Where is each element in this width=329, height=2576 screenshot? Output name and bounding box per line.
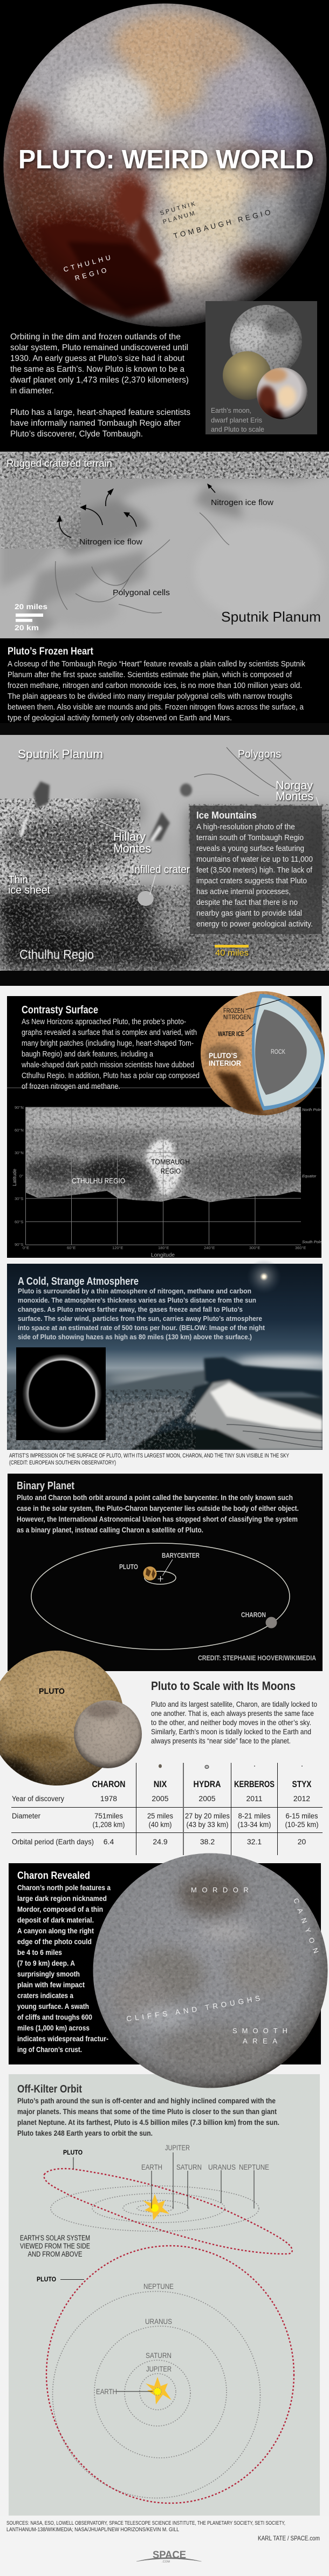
labels: WATER ICE <box>218 1031 244 1038</box>
body text: Mordor, composed of a thin <box>17 1905 103 1913</box>
body text: surprisingly smooth <box>17 1970 80 1978</box>
body text: Pluto’s path around the sun is off-center and and highly inclined compared with the <box>17 2097 276 2105</box>
axis labels: 90°N <box>15 1105 24 1110</box>
intro text <box>10 332 190 439</box>
axis labels: 30°N <box>15 1150 24 1155</box>
map labels <box>72 1157 190 1185</box>
row: diameter: 25 miles <box>147 1811 173 1820</box>
row: year of discovery: 1978 <box>100 1794 117 1803</box>
body text: nearby gas giant to provide tidal <box>196 909 302 918</box>
icons: small moons <box>159 1764 303 1769</box>
icon: Pluto <box>143 1566 156 1580</box>
label: Cthulhu Regio: Cthulhu Regio <box>19 948 94 962</box>
caption: viewing angles: EARTH’S SOLAR SYSTEM <box>20 2234 90 2242</box>
intro text: have informally named Tombaugh Regio after <box>10 419 181 428</box>
intro text: Pluto’s discoverer, Clyde Tombaugh. <box>10 430 143 439</box>
leader lines <box>99 797 322 895</box>
planet orbits <box>53 2291 260 2498</box>
caption: artist's impression: (CREDIT: EUROPEAN SOUTHERN OBSERVATORY) <box>9 1460 116 1466</box>
panel: Off-Kilter Orbit <box>17 2083 294 2503</box>
heading: Binary Planet <box>17 1480 74 1492</box>
image: ice mountains photo <box>0 735 329 972</box>
labels: JUPITER <box>165 2143 190 2152</box>
row: year of discovery: 2012 <box>293 1794 310 1803</box>
axis labels: South Pole <box>302 1239 322 1244</box>
axis labels: 60°N <box>15 1128 24 1133</box>
body text: miles (1,000 km) across <box>17 2024 90 2032</box>
body text: terrain south of Tombaugh Regio <box>196 834 304 842</box>
diagram: side view of orbits <box>44 2143 292 2254</box>
labels: PLUTO’S <box>209 1051 237 1060</box>
table headers: KERBEROS <box>234 1780 275 1789</box>
icon: barycenter cross <box>157 1576 163 1582</box>
photo labels: Hillary <box>113 830 146 843</box>
body text: Cthulhu Regio. In addition, Pluto has a polar cap composed <box>22 1072 200 1080</box>
row: orbital period: 32.1 <box>247 1837 262 1846</box>
axis labels: 300°E <box>249 1245 261 1250</box>
map: Pluto surface <box>12 1105 322 1258</box>
planet orbits <box>51 2186 259 2231</box>
photo labels: Polygons <box>238 748 281 760</box>
caption: to scale: dwarf planet Eris <box>211 416 262 424</box>
image: artist's surface view <box>7 1357 329 1450</box>
Pluto orbit <box>46 2246 294 2503</box>
body text: side of Pluto showing hazes as high as 80 miles (130 km) above the surface.) <box>18 1333 252 1341</box>
row: diameter <box>12 1811 318 1829</box>
body text: graphs revealed a surface that is complex and varied, with <box>22 1028 197 1037</box>
labels: NEPTUNE <box>143 2282 174 2291</box>
row: diameter: (43 by 33 km) <box>187 1820 229 1829</box>
panel: hero <box>0 0 329 452</box>
labels: FROZEN <box>223 1008 244 1014</box>
row: orbital period: 20 <box>298 1837 306 1846</box>
body text: into space at an estimated rate of 500 tons per hour. (BELOW: Image of the night <box>18 1324 265 1332</box>
heading: A Cold, Strange Atmosphere <box>18 1276 139 1287</box>
row: year of discovery: Year of discovery <box>12 1794 64 1803</box>
panel: Charon Revealed <box>9 1853 328 2088</box>
body text: monoxide. The atmosphere’s thickness varies as Pluto’s distance from the sun <box>18 1296 256 1304</box>
intro text: 1930. An early guess at Pluto’s size had it about <box>10 354 185 363</box>
caption: artist's impression <box>9 1453 289 1466</box>
axis labels: Longitude <box>151 1252 175 1258</box>
row: diameter: (1,208 km) <box>93 1820 125 1829</box>
body text: type of geological activity formerly only observed on Earth and Mars. <box>8 714 232 723</box>
photo labels: Montes <box>113 842 151 855</box>
body text: As New Horizons approached Pluto, the probe’s photo- <box>22 1018 186 1026</box>
caption: viewing angles: VIEWED FROM THE SIDE <box>20 2242 90 2250</box>
body text: plain with few impact <box>17 1981 85 1989</box>
logo: Space.com <box>136 2550 202 2564</box>
labels: EARTH <box>141 2163 162 2171</box>
body text: A closeup of the Tombaugh Regio “Heart” feature reveals a plain called by scientists Sputnik <box>8 660 306 669</box>
body text: A canyon along the right <box>17 1927 94 1935</box>
table headers: NIX <box>154 1780 167 1789</box>
diagram: top view of orbits <box>37 2246 294 2503</box>
body text: of cliffs and troughs 600 <box>17 2013 92 2021</box>
row: diameter: 8-21 miles <box>238 1811 271 1820</box>
axis labels: 30°S <box>15 1196 23 1201</box>
body text <box>21 1018 200 1091</box>
body text: many bright patches (including huge, heart-shaped Tom- <box>22 1039 194 1048</box>
body text: impact craters suggests that Pluto <box>196 877 307 885</box>
row: diameter: 6-15 miles <box>286 1811 318 1820</box>
cutaway: water ice layer <box>255 998 321 1106</box>
row: year of discovery: 2005 <box>152 1794 169 1803</box>
body text: deposit of dark material. <box>17 1916 94 1924</box>
axis labels: Equator <box>302 1174 317 1178</box>
photo labels: Infilled crater <box>132 864 190 876</box>
body text: despite the fact that there is no <box>196 898 298 907</box>
photo labels: Sputnik Planum <box>221 609 321 625</box>
labels: EARTH <box>96 2387 117 2396</box>
black strip <box>0 971 329 986</box>
photo labels: Thin <box>8 874 28 886</box>
body text <box>18 1287 265 1341</box>
label: Sputnik Planum: PLANUM <box>162 210 197 226</box>
label: Mordor: MORDOR <box>191 1886 253 1894</box>
label: Sputnik Planum: SPUTNIK <box>160 200 197 217</box>
intro text: the same as Earth’s. Now Pluto is known to be a <box>10 365 184 374</box>
labels: INTERIOR <box>209 1059 241 1067</box>
body text: frozen methane, nitrogen and carbon monoxide ices, is no more than 100 million years old. <box>8 682 302 690</box>
labels: URANUS <box>145 2317 172 2326</box>
body text: The plain appears to be divided into many irregular polygonal cells with narrow troughs <box>8 692 292 701</box>
photo labels: Norgay <box>276 779 313 792</box>
body text <box>151 1700 317 1745</box>
labels: SATURN <box>146 2351 172 2360</box>
labels: CHARON <box>241 1611 266 1619</box>
logo: Space.com: SPACE <box>153 2550 186 2561</box>
body text <box>17 1884 111 2054</box>
icon: sun <box>146 2377 172 2404</box>
scale bar: 20 miles <box>15 602 47 611</box>
axis labels: 120°E <box>112 1245 124 1250</box>
body text: indicates widespread fractur- <box>17 2035 108 2043</box>
axis labels: 180°E <box>158 1245 169 1250</box>
body text: Charon’s north pole features a <box>17 1884 111 1892</box>
body text: reveals a young surface featuring <box>196 844 304 853</box>
heading: Pluto to Scale with Its Moons: Pluto to Scale with Its Moons <box>151 1679 296 1693</box>
body text: craters indicates a <box>17 1992 73 2000</box>
labels <box>209 1008 285 1067</box>
body text: be 4 to 6 miles <box>17 1948 62 1957</box>
body text: large dark region nicknamed <box>17 1894 107 1903</box>
body text <box>17 2097 279 2137</box>
map labels: CTHULHU REGIO <box>72 1176 125 1185</box>
photo labels <box>6 458 321 625</box>
row: diameter: (10-25 km) <box>285 1820 318 1829</box>
heading: Off-Kilter Orbit <box>17 2083 82 2095</box>
row: orbital period <box>12 1837 306 1846</box>
leader lines <box>73 2152 254 2209</box>
image: Sputnik Planum photo <box>0 452 329 638</box>
panel: Off-Kilter Orbit background <box>9 2074 320 2516</box>
leader line <box>163 1559 173 1576</box>
scale bar: 40 miles: 40 miles <box>215 949 249 958</box>
label: Pluto: PLUTO <box>39 1687 65 1696</box>
footer background <box>0 2516 329 2576</box>
axis labels <box>12 1105 322 1258</box>
body text: always presents its “near side” face to the planet. <box>151 1736 291 1745</box>
arrows: nitrogen ice flow <box>59 485 215 537</box>
heading: Ice Mountains <box>196 810 257 821</box>
body text: young surface. A swath <box>17 2002 89 2011</box>
table headers: CHARON <box>92 1780 125 1789</box>
panel: Binary Planet <box>8 1474 323 1671</box>
cutaway: frozen nitrogen layer <box>252 994 324 1110</box>
body text: between them. Also visible are mounds and pits. Frozen nitrogen flows across the surface, a <box>8 703 304 712</box>
labels: NEPTUNE <box>239 2163 269 2171</box>
label: Cthulhu Regio: REGIO <box>74 265 110 282</box>
body text: whale-shaped dark patch mission scientists have dubbed <box>21 1061 194 1069</box>
heading: Contrasty Surface <box>22 1004 98 1016</box>
photo labels: Sputnik Planum <box>18 747 103 761</box>
image: Charon to scale <box>74 1700 142 1768</box>
labels: PLUTO <box>119 1563 138 1571</box>
row: orbital period: 6.4 <box>104 1837 114 1846</box>
body text: Planum after the first space satellite. Scientists estimate the plain, which is composed of <box>8 671 292 679</box>
body text: Pluto is surrounded by a thin atmosphere of nitrogen, methane and carbon <box>18 1287 251 1295</box>
row: orbital period: 24.9 <box>153 1837 168 1846</box>
axis labels: 60°E <box>67 1245 76 1250</box>
caption: viewing angles <box>20 2234 90 2258</box>
heading: Charon Revealed <box>17 1870 90 1882</box>
photo labels: Montes <box>276 789 313 803</box>
title: PLUTO: WEIRD WORLD <box>18 145 314 174</box>
row: orbital period: 38.2 <box>200 1837 215 1846</box>
label: Tombaugh Regio: TOMBAUGH REGIO <box>173 208 274 240</box>
body text: major planets. This means that some of the time Pluto is closer to the sun than giant <box>17 2108 277 2116</box>
row: year of discovery <box>12 1794 310 1803</box>
axis labels: 360°E <box>295 1245 306 1250</box>
intro text: Orbiting in the dim and frozen outlands of the <box>10 332 181 342</box>
body text: has active internal processes, <box>196 888 291 896</box>
photo labels: Nitrogen ice flow <box>79 537 142 547</box>
body text: case in the solar system, the Pluto-Charon barycenter lies outside the body of either object. <box>17 1504 299 1512</box>
table headers: HYDRA <box>193 1780 221 1789</box>
Pluto orbit <box>44 2169 292 2254</box>
body text: edge of the photo could <box>17 1938 92 1946</box>
intro text: in diameter. <box>10 386 54 396</box>
body text <box>196 823 313 929</box>
photo labels <box>8 747 313 896</box>
labels <box>63 2143 269 2171</box>
icon: Charon <box>265 1617 277 1628</box>
sources: LANTHANUM-138/WIKIMEDIA; NASA/JHUAPL/NEW HORIZONS/KEVIN M. GILL <box>6 2526 179 2533</box>
axis labels: 60°S <box>15 1219 23 1224</box>
intro text: Pluto has a large, heart-shaped feature scientists <box>10 408 190 417</box>
panel: Pluto's Frozen Heart <box>0 638 329 735</box>
row: diameter: (40 km) <box>149 1820 172 1829</box>
panel: A Cold, Strange Atmosphere <box>7 1259 329 1450</box>
intro text: dwarf planet only 1,473 miles (2,370 kilometers) <box>10 376 189 385</box>
labels: PLUTO <box>37 2275 56 2283</box>
label: Sputnik Planum <box>160 200 197 226</box>
leader lines <box>60 2279 153 2391</box>
heading: Pluto’s Frozen Heart <box>8 646 94 657</box>
axis labels: North Pole <box>302 1107 321 1112</box>
labels <box>119 1552 266 1619</box>
row: diameter: Diameter <box>12 1811 40 1820</box>
panel: Contrasty Surface <box>7 990 326 1258</box>
image: Pluto globe <box>0 0 329 330</box>
labels: BARYCENTER <box>162 1552 200 1559</box>
callout: Ice Mountains <box>190 806 322 934</box>
body text: Pluto and Charon both orbit around a point called the barycenter. In the only known such <box>17 1494 293 1502</box>
labels: SATURN <box>176 2163 202 2171</box>
row: year of discovery: 2011 <box>246 1794 263 1803</box>
body text: planet Neptune. At its farthest, Pluto is 4.5 billion miles (7.3 billion km) from the sun. <box>17 2118 279 2127</box>
body text: surface. The solar wind, particles from the sun, carries away Pluto’s atmosphere <box>18 1314 262 1323</box>
labels: NITROGEN <box>223 1014 251 1021</box>
inset: Earth's moon, Eris and Pluto to scale <box>205 301 317 434</box>
body text: ing of Charon’s crust. <box>17 2046 82 2054</box>
body text: as a binary planet, instead calling Charon a satellite of Pluto. <box>17 1526 203 1534</box>
table: moons of Pluto <box>11 1763 323 1855</box>
photo labels: ice sheet <box>8 884 50 896</box>
axis labels: 240°E <box>204 1245 215 1250</box>
label: Canyon: CANYON <box>292 1897 323 1960</box>
body text: However, the International Astronomical Union has stopped short of classifying the system <box>17 1515 298 1523</box>
cutaway: rock core <box>255 1010 307 1095</box>
axis labels: 0°E <box>23 1245 29 1250</box>
diagram: Pluto's interior <box>200 990 326 1117</box>
scale bar: 40 miles <box>215 945 249 958</box>
image: Charon <box>92 1851 329 2091</box>
photo labels: Rugged cratered terrain <box>6 458 112 469</box>
photo labels: Polygonal cells <box>113 588 170 597</box>
scale bar: 20 km <box>15 623 39 632</box>
diagram: barycenter orbits <box>31 1543 290 1650</box>
label: Smooth Area: AREA <box>243 2037 282 2045</box>
label: Cliffs and Troughs: CLIFFS AND TROUGHS <box>127 1995 260 2021</box>
caption: viewing angles: AND FROM ABOVE <box>28 2250 82 2258</box>
image: Pluto to scale <box>0 1651 142 1786</box>
arrowheads <box>57 483 212 522</box>
map labels: REGIO <box>161 1167 181 1175</box>
body text: to the other, and neither body moves in the other’s sky. <box>151 1718 311 1727</box>
row: diameter: 751miles <box>94 1811 123 1820</box>
photo labels: Nitrogen ice flow <box>211 498 273 507</box>
row: year of discovery: 2005 <box>198 1794 216 1803</box>
sun <box>247 1259 282 1294</box>
body text: mountains of water ice up to 11,000 <box>196 855 313 864</box>
labels: JUPITER <box>146 2364 172 2373</box>
grid lines <box>26 1107 301 1245</box>
labels: URANUS <box>208 2163 236 2171</box>
inset: night side of Pluto <box>16 1347 106 1440</box>
body text: energy to power geological activity. <box>196 920 313 929</box>
caption: to scale <box>211 406 264 433</box>
scale bar <box>15 602 47 632</box>
body text: feet (3,500 meters) high. The lack of <box>196 866 313 875</box>
body text: (7 to 9 km) deep. A <box>17 1959 75 1967</box>
sources <box>6 2520 285 2533</box>
axis labels: 0° <box>19 1174 23 1178</box>
labels: ROCK <box>271 1049 285 1055</box>
label: Smooth Area: SMOOTH <box>232 2027 292 2035</box>
body text: baugh Regio) and dark features, including a <box>22 1050 154 1059</box>
map labels: TOMBAUGH <box>151 1157 190 1166</box>
logo: Space.com: .COM <box>162 2560 170 2564</box>
axis labels: Latitude <box>12 1169 17 1186</box>
body text: changes. As Pluto moves farther away, the gases freeze and fall to Pluto’s <box>18 1305 243 1313</box>
row: diameter: 27 by 20 miles <box>185 1811 230 1820</box>
body text <box>8 660 306 723</box>
labels <box>37 2275 174 2396</box>
caption: to scale: Earth’s moon, <box>211 406 251 414</box>
labels: PLUTO <box>63 2149 83 2156</box>
table headers <box>92 1780 312 1789</box>
body text: A high-resolution photo of the <box>196 823 295 832</box>
leader lines <box>246 999 281 1032</box>
icon: sun <box>143 2194 169 2220</box>
body text <box>17 1494 299 1534</box>
row: diameter: (13-34 km) <box>237 1820 271 1829</box>
label: Smooth Area <box>232 2027 292 2045</box>
intro text: solar system, Pluto remained undiscovered until <box>10 343 188 352</box>
axis labels: 90°S <box>15 1242 23 1247</box>
label: Cthulhu Regio: CTHULHU <box>63 253 114 274</box>
caption: to scale: and Pluto to scale <box>211 425 264 433</box>
body text: of frozen nitrogen and methane. <box>22 1082 120 1091</box>
body text: Pluto takes 248 Earth years to orbit the sun. <box>17 2129 153 2137</box>
row: orbital period: Orbital period (Earth days) <box>12 1837 94 1846</box>
table headers: STYX <box>292 1780 312 1789</box>
